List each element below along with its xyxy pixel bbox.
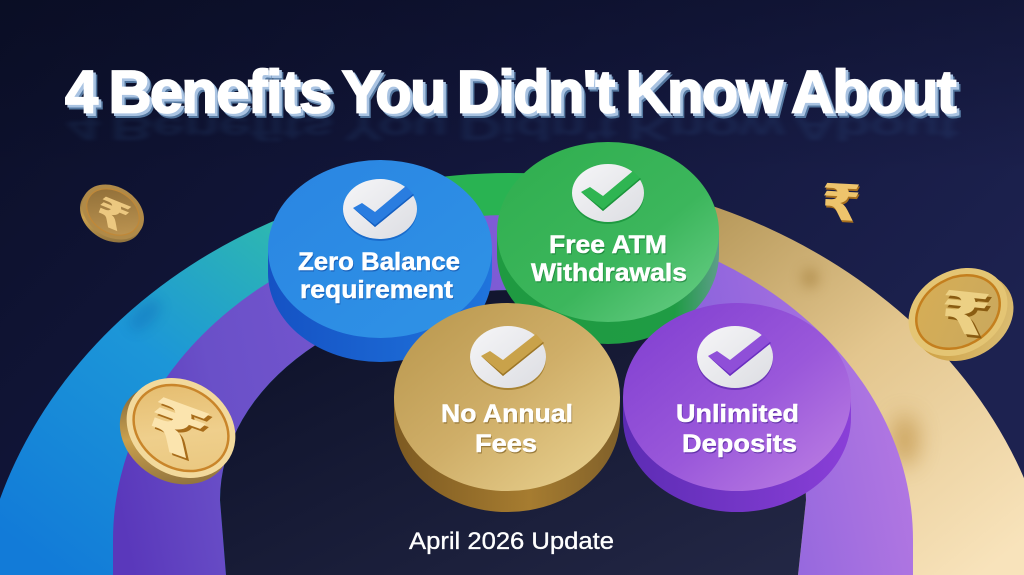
label: No Annual Fees [441,400,574,460]
coin: right: ₹ [940,282,996,352]
rupee symbol: floating: ₹ [819,174,862,232]
title: 4 Benefits You Didn't Know About [68,61,959,128]
disc: Unlimited Deposits [623,303,851,512]
label: No Annual Fees: No Annual [441,400,573,428]
label: No Annual Fees: Fees [476,432,538,460]
icon: gold check badge [470,326,546,390]
date label: April 2026 Update [409,528,614,555]
label: Free ATM Withdrawals: Free ATM [550,232,668,260]
inner arc: purple band [113,215,913,575]
title: 4 Benefits You Didn't Know About [69,63,961,130]
center dark well [220,290,806,575]
outer arc: blue, green and gold band [0,150,1024,575]
label: Zero Balance requirement [298,248,461,306]
coin: small upper left: ₹ [88,189,136,241]
label: Zero Balance requirement: Zero Balance [298,248,460,276]
label: Unlimited Deposits: Deposits [682,430,797,458]
coin: large lower left: ₹ [137,387,221,479]
label: Free ATM Withdrawals: Free ATM [549,231,667,259]
icon: blue check badge [343,179,417,241]
coin: right [892,250,1024,379]
label: Zero Balance requirement: requirement [300,276,454,304]
icon: purple check badge [697,326,773,390]
coin: large lower left [101,358,254,505]
label: Unlimited Deposits [676,400,800,460]
label: Free ATM Withdrawals [531,231,688,288]
label: Zero Balance requirement: requirement [301,278,455,306]
title: 4 Benefits You Didn't Know About [67,110,958,146]
disc: Free ATM Withdrawals [497,142,719,344]
label: Unlimited Deposits: Unlimited [677,402,800,430]
disc: No Annual Fees [394,303,620,512]
label: Unlimited Deposits: Unlimited [676,400,799,428]
title: 4 Benefits You Didn't Know About [65,58,957,126]
label: No Annual Fees: Fees [475,430,537,458]
label: Free ATM Withdrawals: Withdrawals [532,260,688,288]
label: Free ATM Withdrawals: Withdrawals [531,259,687,287]
icon: green check badge [572,164,644,224]
disc: Zero Balance requirement [268,160,492,362]
label: Zero Balance requirement: Zero Balance [299,250,461,278]
coin: large lower left: ₹ [134,384,218,476]
coin: right: ₹ [937,279,993,349]
label: No Annual Fees: No Annual [442,402,574,430]
coin: small upper left [70,173,154,254]
rupee symbol: floating: ₹ [820,176,863,234]
label: Unlimited Deposits: Deposits [683,432,798,460]
